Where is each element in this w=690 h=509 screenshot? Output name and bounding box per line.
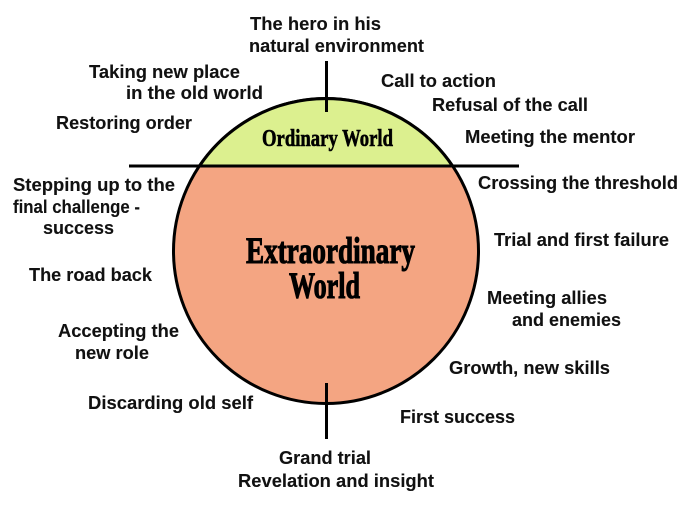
label: accepting the new role [58, 321, 179, 363]
label: meeting allies and enemies [487, 288, 621, 330]
label: hero in natural environment [249, 14, 424, 56]
label: grand trial, revelation and insight: Revelation and insight [238, 471, 434, 491]
label: accepting the new role: Accepting the [58, 321, 179, 341]
label: accepting the new role: new role [75, 343, 149, 363]
label: meeting allies and enemies: Meeting allies [487, 288, 607, 308]
label: hero in natural environment: The hero in his [250, 14, 381, 34]
label: first success: First success [400, 407, 515, 427]
label: call to action: Call to action [381, 71, 496, 91]
label: restoring order: Restoring order [56, 113, 192, 133]
label: meeting the mentor: Meeting the mentor [465, 127, 635, 147]
arrow tick: bottom [325, 383, 328, 439]
label: taking new place: in the old world [126, 83, 263, 103]
heading: extraordinary world: Extraordinary [246, 231, 415, 272]
divider line between worlds [129, 164, 519, 168]
label: growth, new skills: Growth, new skills [449, 358, 610, 378]
label: stepping up to the final challenge: final challenge - [13, 197, 140, 217]
label: taking new place [89, 62, 263, 103]
label: grand trial, revelation and insight: Grand trial [279, 448, 371, 468]
label: trial and first failure: Trial and first failure [494, 230, 669, 250]
label: stepping up to the final challenge: Stepping up to the [13, 175, 175, 195]
label: refusal of the call: Refusal of the call [432, 95, 588, 115]
label: hero in natural environment: natural environment [249, 36, 424, 56]
panel: ordinary world cap [200, 99, 452, 166]
label: crossing the threshold: Crossing the threshold [478, 173, 678, 193]
label: grand trial, revelation and insight [238, 448, 434, 491]
heading: ordinary world: Ordinary World [262, 126, 394, 152]
label: meeting allies and enemies: and enemies [512, 310, 621, 330]
label: stepping up to the final challenge [13, 175, 175, 238]
heading: extraordinary world: World [289, 266, 360, 307]
label: taking new place: Taking new place [89, 62, 240, 82]
heading: extraordinary world [246, 231, 415, 307]
panel: extraordinary world circle [174, 98, 478, 404]
arrow tick: top [325, 61, 328, 112]
label: stepping up to the final challenge: success [43, 218, 114, 238]
label: discarding old self: Discarding old self [88, 393, 254, 413]
label: the road back: The road back [29, 265, 153, 285]
